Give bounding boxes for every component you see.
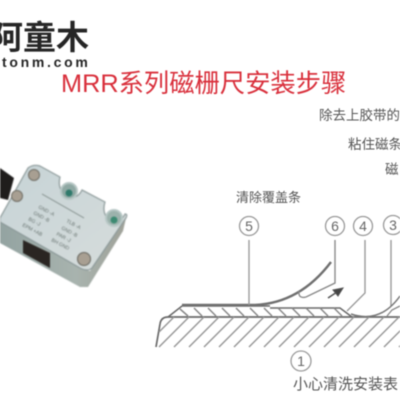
product photo: magnetic sensor: GND -B: [60, 225, 79, 239]
installation diagram: 6: [331, 218, 339, 234]
roller curve: [351, 296, 400, 317]
installation diagram: 1: [297, 353, 305, 369]
label: remove adhesive tape: 除去上胶带的: [319, 108, 400, 123]
cable: [0, 168, 14, 200]
right tape piece: [387, 306, 400, 316]
leader 3: [390, 240, 392, 306]
installation diagram: 4: [359, 218, 367, 234]
product photo: magnetic sensor: BG -J: [27, 216, 42, 228]
top face: [0, 165, 127, 270]
product photo: magnetic sensor: EPM +AB: [21, 222, 44, 238]
title: MRR系列磁栅尺安装步骤: [61, 70, 346, 98]
logo url: tonm.com: [2, 54, 90, 70]
product photo: magnetic sensor: GND -B: [32, 210, 51, 224]
window: [23, 240, 50, 268]
mounting holes: [61, 183, 77, 199]
product photo: magnetic sensor: TLB -A: [65, 218, 82, 231]
adhesive tape: [168, 306, 352, 317]
screws: [28, 170, 40, 180]
arrow: [328, 288, 343, 298]
base surface with hatching: [156, 317, 400, 347]
product photo: magnetic sensor: BH GND: [50, 237, 70, 252]
leader 6: [299, 240, 335, 297]
label: magnetic: 磁: [385, 162, 398, 177]
circled numbers: [240, 216, 400, 371]
installation diagram: 5: [245, 218, 253, 234]
label: clear cover strip: 清除覆盖条: [236, 190, 301, 205]
installation diagram: 3: [389, 217, 397, 233]
label: clean mounting surface: 小心清洗安装表: [293, 376, 398, 393]
printed label lines: [42, 194, 84, 218]
peeled cover strip: [182, 262, 331, 305]
leader 4: [347, 240, 365, 311]
leader 5: [248, 240, 250, 305]
side faces: [0, 214, 127, 287]
product photo: magnetic sensor: GND -A: [37, 204, 56, 218]
logo: [0, 19, 90, 70]
product photo: magnetic sensor: PAR -J: [55, 231, 72, 244]
